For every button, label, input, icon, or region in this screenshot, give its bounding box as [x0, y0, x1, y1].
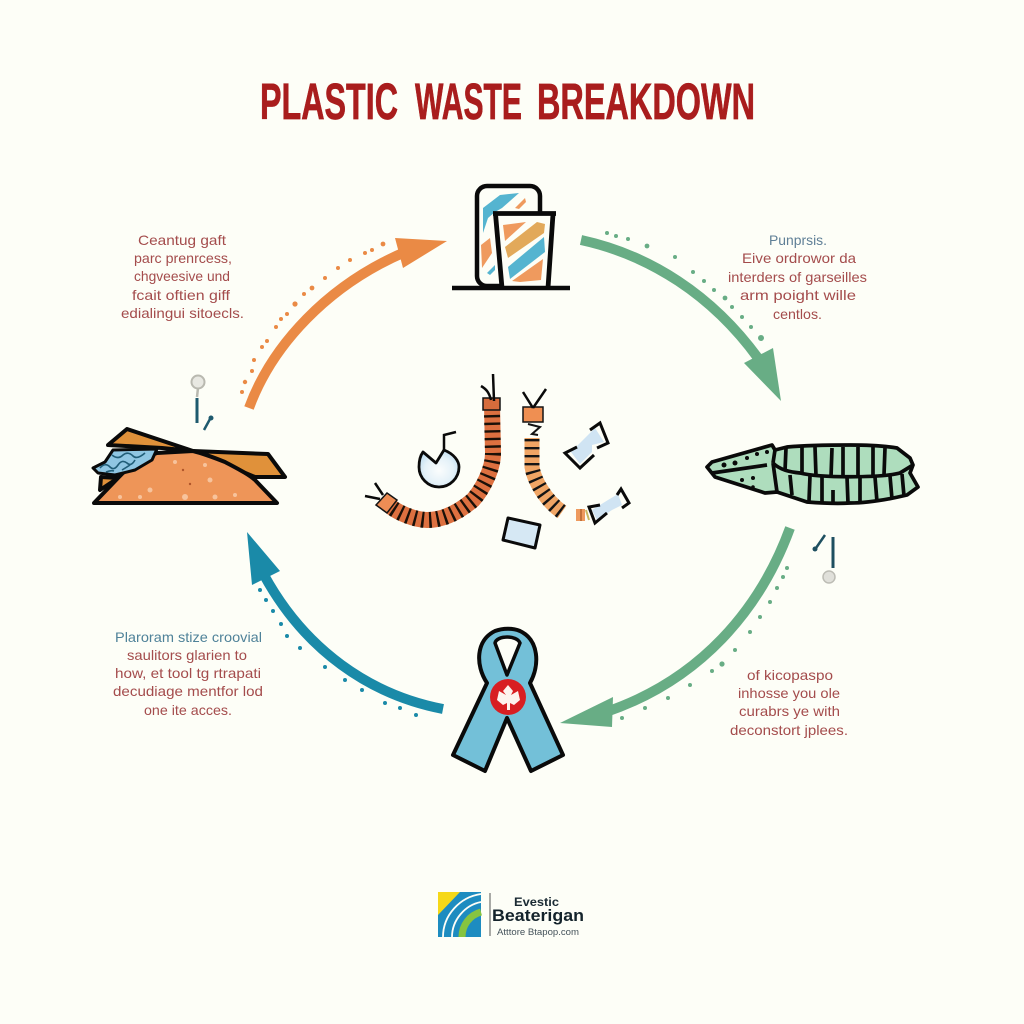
text block: bottom left: one ite acces. — [144, 702, 232, 718]
text block: top right: Eive ordrowor da — [742, 250, 856, 266]
text block: top right — [728, 232, 867, 322]
text block: bottom left: saulitors glarien to — [127, 647, 247, 663]
text block: bottom right: deconstort jplees. — [730, 722, 848, 738]
text block: top left: fcait oftien giff — [132, 287, 230, 303]
icon: degraded plastic sheets — [93, 429, 285, 503]
text block: bottom right — [730, 667, 848, 738]
text block: bottom right: curabrs ye with — [739, 703, 840, 719]
logo — [438, 892, 584, 937]
arrow: teal, bottom to left — [247, 532, 443, 717]
text block: top right: Punprsis. — [769, 232, 827, 248]
arrow: green, right to bottom — [560, 528, 790, 727]
logo: Atttore Btapop.com — [497, 927, 579, 937]
text block: top left — [121, 232, 244, 321]
text block: bottom right: inhosse you ole — [738, 685, 840, 701]
title: WASTE — [415, 73, 522, 130]
right tube — [523, 389, 589, 521]
title: PLASTIC — [260, 73, 398, 130]
logo: Evestic — [514, 895, 559, 909]
bow fragment lower — [589, 489, 629, 523]
title — [260, 73, 755, 130]
text block: bottom left: how, et tool tg rtrapati — [115, 665, 261, 681]
left tube — [365, 374, 500, 520]
icon: left pin — [192, 376, 214, 430]
logo: Beaterigan — [492, 906, 584, 925]
text block: bottom right: of kicopaspo — [747, 667, 833, 683]
text block: top left: parc prenrcess, — [134, 250, 232, 266]
text block: top right: arm poight wille — [740, 287, 856, 303]
text block: top left: chgveesive und — [134, 268, 230, 284]
icon: central broken tubes and fragments — [365, 374, 629, 548]
icon: green plastic tube — [707, 445, 918, 503]
square fragment — [503, 518, 540, 548]
arrow: green, top to right — [581, 231, 781, 401]
text block: top right: centlos. — [773, 306, 822, 322]
bow fragment upper — [565, 423, 608, 468]
icon: awareness ribbon — [453, 629, 563, 771]
circle fragment — [419, 432, 459, 487]
text block: bottom left: decudiage mentfor lod — [113, 683, 263, 699]
icon: right pin — [812, 535, 835, 583]
text block: top right: interders of garseilles — [728, 269, 867, 285]
text block: top left: edialingui sitoecls. — [121, 305, 244, 321]
arrow: orange, left to top — [240, 238, 447, 408]
title: BREAKDOWN — [537, 73, 755, 130]
logo mark — [438, 892, 481, 937]
text block: bottom left: Plaroram stize croovial — [115, 629, 262, 645]
text block: top left: Ceantug gaft — [138, 232, 226, 248]
text block: bottom left — [113, 629, 263, 718]
icon: plastic cups — [452, 186, 570, 288]
